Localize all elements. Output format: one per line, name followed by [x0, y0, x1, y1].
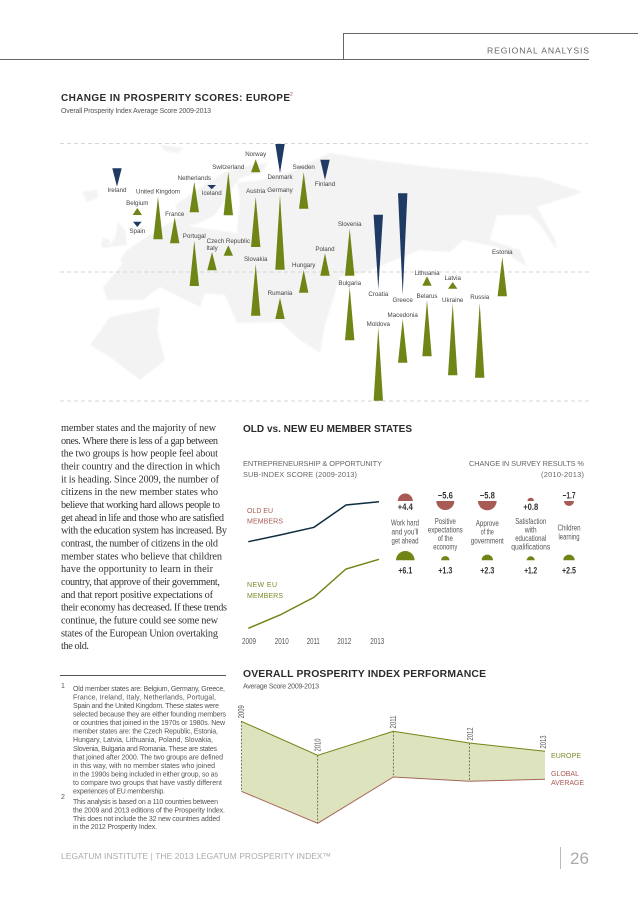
body text column: their country and the direction in which [61, 462, 221, 472]
footnotes: 2 [61, 794, 65, 801]
new member values: +6.1 [398, 566, 412, 576]
line chart: entrepreneurship and opportunity [242, 459, 385, 646]
footnotes: in this way, with no member states who joined [73, 763, 215, 770]
line chart: entrepreneurship and opportunity: ENTREPRENEURSHIP & OPPORTUNITY [243, 459, 382, 468]
footnotes: selected because they are either founding members [73, 712, 226, 719]
new member semicircles [396, 551, 575, 560]
country labels: Germany [267, 187, 294, 194]
new member values [398, 566, 576, 576]
country labels: Estonia [492, 249, 513, 256]
footnotes: Slovenia, Bulgaria and Romania. These are states [73, 746, 218, 753]
survey question labels: Children [558, 523, 580, 532]
old member values: −1.7 [562, 490, 576, 500]
survey question labels: government [471, 536, 504, 545]
body text column: states of the European Union overtaking [61, 628, 218, 639]
old member values: +4.4 [398, 502, 413, 512]
country labels: Greece [393, 297, 413, 304]
old member values [398, 490, 576, 512]
heading: overall prosperity index performance [243, 669, 486, 690]
country labels: Austria [246, 188, 266, 195]
footnotes: experiences of EU membership. [73, 789, 165, 796]
survey question labels: Approve [476, 519, 499, 528]
country labels: Lithuania [414, 270, 440, 277]
area chart: Europe vs global average [237, 705, 584, 823]
country labels: Russia [470, 294, 490, 301]
survey results panel: CHANGE IN SURVEY RESULTS % [469, 459, 584, 468]
country labels: Denmark [267, 174, 293, 181]
area chart: Europe vs global average: 2010 [314, 738, 322, 751]
green triangles: score increase [133, 159, 507, 401]
country labels: Iceland [202, 190, 222, 197]
survey question labels [391, 517, 580, 551]
country labels [108, 151, 513, 328]
footnotes: or countries that joined in the 1970s or 1980s. New [73, 720, 226, 727]
line chart: entrepreneurship and opportunity: NEW EU [247, 582, 277, 589]
body text column: ones. Where there is less of a gap between [61, 436, 218, 447]
body text column: their economy has decreased. If these trends [61, 603, 227, 614]
survey question labels: Positive [435, 517, 456, 526]
country labels: Czech Republic [207, 238, 250, 245]
footnotes: to compare two groups that have vastly different [73, 780, 222, 787]
body text column: and that report positive expectations of [61, 590, 214, 601]
old member values: −5.8 [480, 490, 495, 500]
country labels: France [165, 211, 185, 218]
old member values: −5.6 [438, 490, 453, 500]
old member values: +0.8 [523, 502, 538, 512]
body text column: get ahead in life and those who are satisfied [61, 513, 225, 524]
new member values: +2.3 [480, 566, 494, 576]
survey question labels: economy [433, 542, 457, 551]
survey question labels: of the [481, 527, 494, 536]
country labels: Belarus [417, 293, 437, 300]
country labels: Rumania [268, 290, 293, 297]
page footer: LEGATUM INSTITUTE | THE 2013 LEGATUM PROSPERITY INDEX™ [61, 851, 331, 861]
line chart: entrepreneurship and opportunity: OLD EU [247, 508, 273, 515]
country labels: Switzerland [212, 164, 245, 171]
new member values: +1.2 [524, 566, 537, 576]
area chart: Europe vs global average: 2013 [539, 735, 548, 748]
country labels: Latvia [444, 275, 462, 282]
survey question labels: with [524, 525, 537, 534]
survey results panel [391, 459, 584, 576]
country labels: Sweden [293, 164, 315, 171]
country labels: Spain [129, 228, 146, 235]
page footer: 26 [570, 849, 589, 868]
survey question labels: of the [438, 534, 453, 543]
country labels: Ukraine [442, 297, 464, 304]
survey question labels: qualifications [511, 542, 550, 551]
heading: change in prosperity scores [61, 92, 293, 115]
footnotes: Old member states are: Belgium, Germany, Greece, [73, 686, 225, 693]
area chart: Europe vs global average: 2011 [389, 715, 398, 729]
country labels: Macedonia [388, 312, 418, 319]
body text column: member states who believe that children [61, 551, 222, 562]
footnotes [60, 676, 226, 831]
country labels: Portugal [183, 233, 206, 240]
body text column: it is heading. Since 2009, the number of [61, 474, 220, 485]
line chart: entrepreneurship and opportunity: 2013 [370, 637, 385, 646]
page footer [61, 847, 589, 869]
country labels: Croatia [368, 291, 389, 298]
footnotes: in the 1990s being included in either group, so as [73, 771, 218, 778]
line chart: entrepreneurship and opportunity: 2011 [307, 637, 320, 646]
area chart: Europe vs global average: 2009 [237, 705, 246, 718]
survey question labels: Work hard [391, 519, 419, 528]
country labels: Hungary [292, 262, 316, 269]
background map [82, 145, 583, 380]
blue triangles: score decrease [112, 144, 407, 295]
country labels: Slovakia [244, 256, 268, 263]
survey question labels: learning [558, 532, 580, 541]
country labels: Finland [315, 181, 336, 188]
area chart: Europe vs global average: AVERAGE [551, 780, 584, 787]
footnotes: This does not include the 32 new countries added [73, 816, 220, 823]
body text column: member states and the majority of new [61, 423, 217, 434]
country labels: Ireland [108, 187, 127, 194]
body text column: citizens in the new member states who [61, 487, 218, 498]
footnotes: 1 [61, 683, 65, 690]
footnotes: that joined after 2000. The two groups are defined [73, 754, 223, 761]
area chart: Europe vs global average: 2012 [466, 727, 475, 740]
map panel: Europe prosperity change [60, 144, 590, 401]
old member semicircles [398, 494, 574, 510]
heading: change in prosperity scores: 2 [290, 92, 293, 98]
body text column: have the opportunity to learn in their [61, 564, 214, 575]
survey question labels: and you'll [392, 528, 419, 537]
line chart: entrepreneurship and opportunity: MEMBERS [247, 593, 283, 600]
body text column [61, 423, 228, 652]
page header: REGIONAL ANALYSIS [487, 46, 589, 56]
body text column: with the education system has increased. By [61, 526, 228, 537]
new member values: +1.3 [438, 566, 452, 576]
body text column: the two groups is how people feel about [61, 449, 218, 460]
footnotes: France, Ireland, Italy, Netherlands, Portugal, [73, 694, 216, 702]
survey question labels: get ahead [392, 537, 418, 546]
country labels: Norway [245, 151, 267, 158]
line chart: entrepreneurship and opportunity: 2009 [242, 637, 256, 646]
survey question labels: Satisfaction [515, 517, 546, 526]
body text column: contrast, the number of citizens in the old [61, 538, 219, 550]
country labels: Poland [315, 246, 335, 253]
footnotes: Hungary, Latvia, Lithuania, Poland, Slovakia, [73, 737, 213, 744]
footnotes: member states are: the Czech Republic, Estonia, [73, 729, 218, 736]
survey results panel: (2010-2013) [541, 470, 584, 479]
line chart: entrepreneurship and opportunity: MEMBERS [247, 518, 283, 526]
body text column: country, that approve of their government, [61, 577, 220, 588]
body text column: believe that working hard allows people to [61, 500, 220, 511]
country labels: Italy [206, 245, 219, 252]
heading: old vs new EU member states: OLD vs. NEW EU MEMBER STATES [243, 424, 412, 435]
footnotes: in the 2012 Prosperity Index. [73, 824, 157, 831]
country labels: Moldova [367, 321, 391, 328]
footnotes: Spain and the United Kingdom. These states were [73, 703, 219, 710]
body text column: the old. [61, 641, 89, 652]
heading: change in prosperity scores: Overall Prosperity Index Average Score 2009-2013 [61, 108, 211, 115]
country labels: Slovenia [338, 221, 362, 228]
line chart: entrepreneurship and opportunity: SUB-INDEX SCORE (2009-2013) [243, 470, 357, 479]
heading: overall prosperity index performance: OVERALL PROSPERITY INDEX PERFORMANCE [243, 669, 486, 680]
area chart: Europe vs global average: EUROPE [551, 753, 581, 760]
survey question labels: expectations [428, 525, 463, 534]
body text column: continue, the future could see some new [61, 616, 219, 626]
country labels: United Kingdom [136, 188, 180, 196]
line chart: entrepreneurship and opportunity: 2010 [275, 637, 289, 646]
survey question labels: educational [515, 534, 546, 543]
country labels: Bulgaria [338, 280, 362, 287]
country labels: Belgium [126, 200, 148, 207]
area chart: Europe vs global average: GLOBAL [551, 771, 579, 778]
new member values: +2.5 [562, 566, 576, 576]
country labels: Netherlands [178, 175, 211, 182]
page header [0, 34, 638, 60]
heading: overall prosperity index performance: Average Score 2009-2013 [243, 684, 319, 690]
heading: change in prosperity scores: CHANGE IN PROSPERITY SCORES: EUROPE [61, 93, 290, 104]
footnotes: the 2009 and 2013 editions of the Prosperity Index. [73, 807, 225, 814]
line chart: entrepreneurship and opportunity: 2012 [337, 637, 352, 646]
footnotes: This analysis is based on a 110 countries between [73, 799, 218, 806]
